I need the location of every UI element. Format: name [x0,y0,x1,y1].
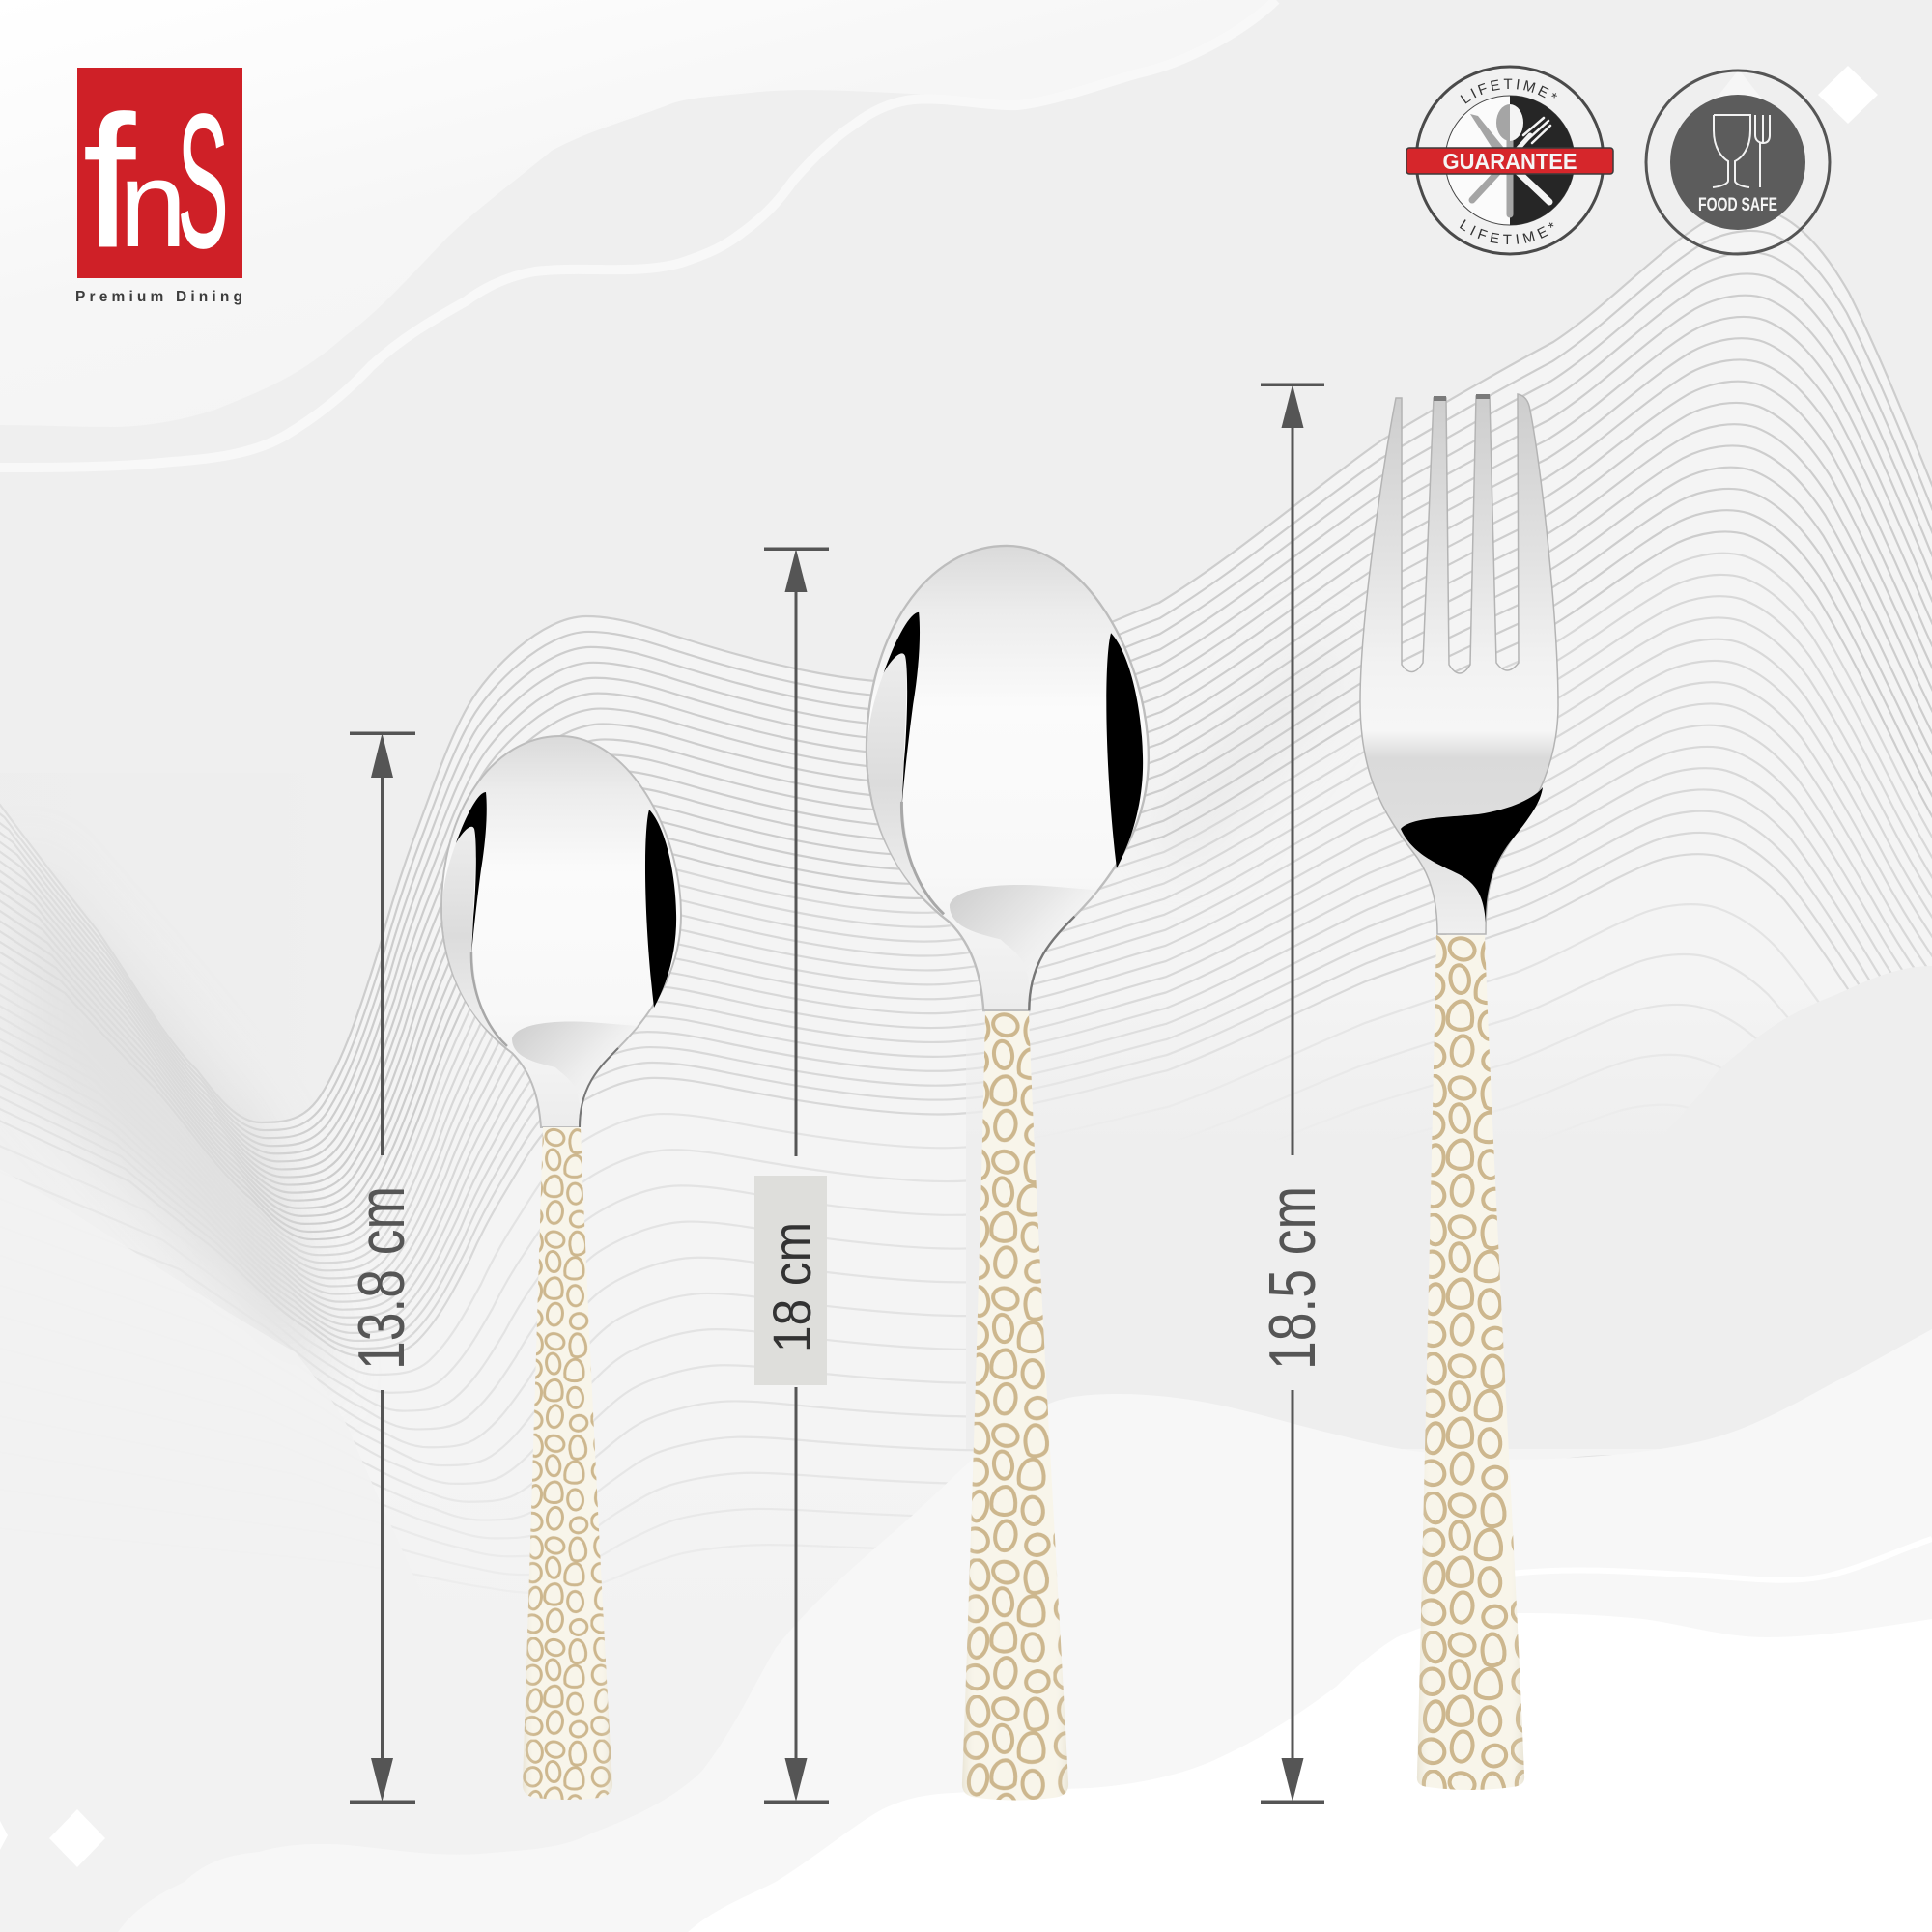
small spoon [441,736,681,1800]
fork [1360,394,1558,1790]
dimension: 18.5 cm [1256,383,1329,1804]
badge cutlery icons [1470,104,1550,214]
badge arc text [1460,79,1557,244]
dimension: 18 cm [754,547,829,1804]
badge: food safe [1646,71,1830,254]
small spoon bowl [441,736,681,1127]
lower background waves [0,773,1932,1932]
badge arc text: LIFETIME* [1461,79,1557,104]
logo wordmark: S [178,75,228,287]
fork handle [1417,935,1524,1790]
food safe glass and fork icon [1713,115,1770,187]
badge red guarantee band [1406,148,1613,174]
logo wordmark: f [83,77,136,287]
logo [75,68,242,305]
logo red square [77,68,242,278]
logo wordmark: n [119,135,187,272]
label 18.5 cm: 18.5 cm [1256,1186,1329,1370]
badge arc text: LIFETIME* [1460,219,1553,244]
logo tagline: Premium Dining [75,289,242,305]
large spoon bowl [867,546,1149,1010]
badge: lifetime guarantee [1406,66,1614,255]
large spoon handle [962,1011,1068,1801]
fork head [1360,394,1558,934]
badge red guarantee band: GUARANTEE [1443,149,1577,174]
fork reflection [1401,787,1543,923]
badge inner half discs [1445,96,1575,225]
small spoon handle [523,1127,612,1800]
mesh wave lines [0,97,1932,1624]
dimension: 13.8 cm [345,732,418,1804]
label box 18 cm [754,1176,827,1385]
logo wordmark [83,75,228,287]
label 13.8 cm: 13.8 cm [345,1186,418,1370]
label box 18 cm: 18 cm [761,1222,822,1352]
fork tine tips [1434,394,1490,401]
large spoon [867,546,1149,1800]
wave: pale band [118,1329,1932,1932]
wave: white foreground [688,1613,1932,1932]
food safe label: FOOD SAFE [1698,195,1777,215]
